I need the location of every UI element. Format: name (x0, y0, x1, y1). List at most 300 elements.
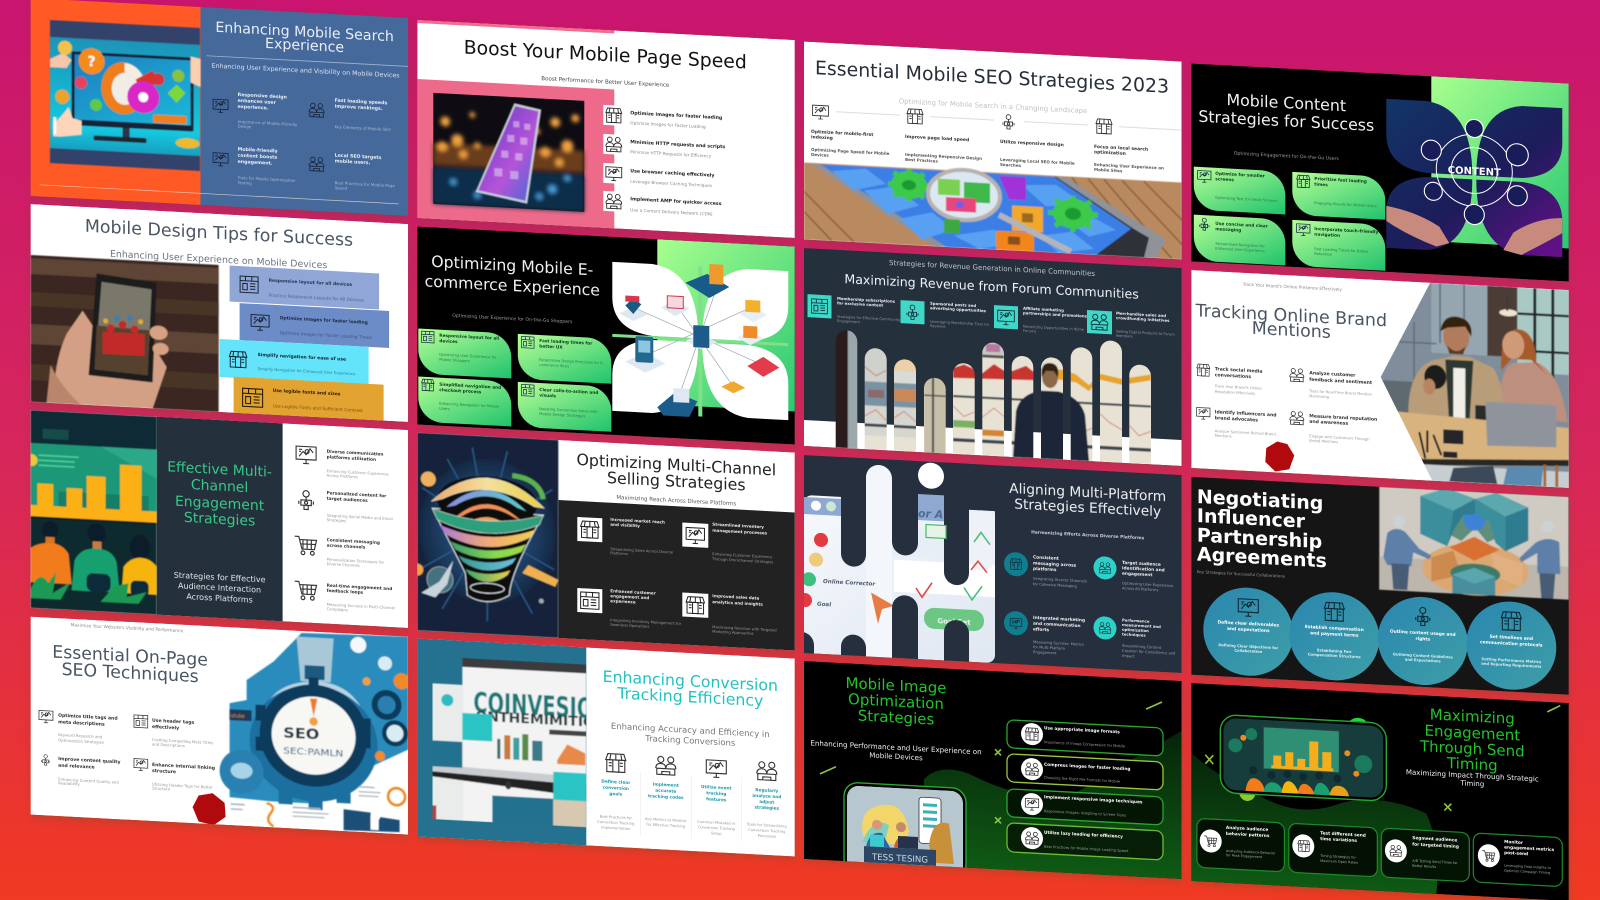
circle item 2: Establish compensation (1305, 625, 1364, 633)
card 4 (518, 382, 611, 432)
item 3: brand advocates (1215, 415, 1258, 424)
item: local seo: mobile users. (335, 158, 370, 166)
item 4: analytics and insights (712, 599, 763, 607)
item: mobile-friendly: Mobile-friendly (238, 147, 278, 155)
item 1 (603, 105, 722, 131)
panel: Enhancing Mobile Search Experience slide (31, 0, 409, 219)
pill 2: Choosing the Right File Formats for Mobile (1044, 776, 1121, 784)
column 2: Key Metrics to Monitor (645, 817, 686, 823)
item 3 (577, 586, 682, 631)
card 3: Better Results (1412, 864, 1436, 869)
item 2: Leveraging Membership Tiers for (930, 320, 989, 327)
item 4 (295, 581, 395, 615)
panel: Negotiating Influencer Partnership slide (1191, 475, 1569, 698)
card 4: Clear calls-to-action and (539, 388, 598, 396)
column 3: Common Mistakes in (697, 820, 735, 826)
item 4: Focus on local search (1094, 145, 1148, 153)
eyebrow: Maximize Your Website's Visibility and Performance (71, 622, 183, 634)
column 3: features (706, 796, 727, 803)
column 1: Define clear (601, 780, 630, 786)
card 1: Responsive layout for all (439, 334, 499, 342)
photo: businessmen and 3D blocks (1379, 485, 1569, 601)
item 4: Real-time engagement and (327, 584, 392, 592)
item 3: experience (610, 598, 636, 605)
pill 4 (1007, 823, 1163, 860)
item 3: Integrated marketing (1033, 616, 1085, 624)
item: fast loading: Fast loading speeds (335, 99, 387, 106)
panel: Mobile Image Optimization slide (804, 661, 1182, 893)
pill 2 (1007, 754, 1163, 790)
item 1: Across Platforms (327, 473, 358, 479)
title: Essential On-Page (52, 642, 208, 671)
panel: Mobile Content Strategies slide (1191, 64, 1569, 285)
illustration: SEO gear graphic: SEO (283, 726, 319, 744)
circle item 1: Defining Clear Objectives for (1218, 643, 1278, 650)
item 3: Use browser caching effectively (630, 168, 714, 179)
item 1: indexing (811, 134, 833, 141)
card 1: Optimizing User Experience for (439, 353, 497, 360)
panel: Tracking Online Brand Mentions slide (1191, 270, 1571, 491)
item: responsive design: experience. (238, 104, 269, 112)
item 3: Engagement (1033, 650, 1057, 655)
illustration: online corrector UI behind pill shapes (789, 434, 995, 702)
item 3: Searches (1000, 162, 1022, 168)
card 1: behavior patterns (1226, 831, 1270, 839)
item: local seo (308, 153, 395, 190)
title: commerce Experience (425, 271, 600, 300)
card 3: Segment audience (1412, 836, 1457, 843)
column 1: Implementation (601, 826, 631, 831)
item 4: Utilizing Header Tags for Better (152, 782, 213, 790)
subtitle: Optimizing User Experience for On-the-Go Shoppers (452, 313, 573, 325)
illustration card: mobile testing: TESS TESING (871, 853, 928, 866)
item 2: effectively (152, 724, 179, 731)
item 3: engagement and (610, 593, 649, 600)
item 4 (1290, 411, 1377, 446)
item 4: Structure (152, 786, 171, 792)
pill 3 (1007, 789, 1163, 825)
card 1: screens (1215, 176, 1234, 183)
title: Channel (191, 477, 248, 496)
subtitle: Tracking Conversions (644, 734, 736, 749)
column 1: Conversion Tracking (597, 820, 634, 826)
card 3: for targeted timing (1412, 842, 1459, 850)
card 2: times (1314, 182, 1328, 188)
item 1: Optimize title tags and (58, 714, 118, 722)
card 3 (1381, 828, 1469, 882)
column 4: Conversion Tracking (748, 828, 785, 834)
item 2: Analyze customer (1309, 371, 1355, 379)
column 4: adjust (759, 799, 774, 806)
subtitle: Enhancing User Experience and Visibility on Mobile Devices (212, 63, 400, 80)
item 4: feedback loops (327, 588, 364, 596)
item 2: Enhancing Customer Experience (712, 552, 772, 559)
circle item 1: Collaboration (1234, 649, 1263, 654)
illustration: SEO gear graphic (220, 627, 410, 834)
pill 1: Use appropriate image formats (1044, 725, 1120, 735)
title: Optimizing Mobile E- (431, 252, 593, 279)
item 1: Enhancing Customer Experience (327, 468, 388, 476)
item 4: Merchandise sales and (1116, 311, 1166, 318)
item 1: Keyword Research and (58, 732, 102, 739)
item 4: optimization (1094, 149, 1126, 157)
column 2: accurate (655, 788, 676, 795)
illustration card: mobile testing (844, 782, 966, 882)
item 4 (1094, 119, 1164, 176)
pill 1 (1007, 720, 1163, 756)
item 2: Target audience (1122, 561, 1161, 568)
title: Maximizing (1430, 705, 1515, 728)
column 3: tracking (706, 790, 726, 797)
item 4: Mobile Sites (1094, 167, 1123, 173)
illustration: monitor with target (50, 20, 201, 171)
item 3: partnerships and promotions (1023, 310, 1088, 319)
title: Partnership (1197, 525, 1322, 553)
card 3: A/B Testing Send Times for (1412, 859, 1458, 865)
item 4: Enhance internal linking (152, 763, 215, 771)
card 2: better UX (539, 343, 563, 351)
card 2 (1289, 823, 1377, 877)
item 2 (900, 299, 990, 331)
column 1 (597, 753, 634, 831)
item 3: Mentions (1215, 434, 1232, 439)
eyebrow subtitle: Strategies for Revenue Generation in Online Communities (889, 258, 1095, 278)
item: mobile-friendly: engagement. (238, 159, 273, 167)
illustration: isometric commerce network (612, 259, 788, 422)
card 2: time variations (1320, 836, 1357, 844)
photo: man viewing charts through arches (804, 318, 1182, 470)
item: mobile-friendly: Testing (237, 180, 252, 186)
item 3: Improve content quality (58, 757, 121, 765)
item 2: Through Omnichannel Strategies (711, 557, 773, 564)
item: fast loading: improve rankings. (335, 104, 383, 112)
item 1: and visibility (610, 522, 640, 528)
illustration: online corrector UI behind pill shapes: Goal (817, 602, 831, 608)
circle item 2: and payment terms (1310, 630, 1359, 639)
item 3: for Multi-Platform (1033, 645, 1066, 651)
card 4: Incorporate touch-friendly (1314, 227, 1378, 235)
icon: red heptagon (193, 792, 226, 826)
illustration: content wheel in petals: CONTENT (1448, 165, 1501, 179)
card 1 (418, 329, 511, 378)
card 3: Users (439, 407, 450, 411)
item 1: Track social media (1215, 367, 1262, 375)
card 3: checkout process (439, 387, 482, 395)
card 3: Streamlined Navigation for (1215, 242, 1265, 248)
item 3: Seamless Operations (610, 623, 649, 629)
item 3: Affiliate marketing (1023, 306, 1064, 313)
column 3: Conversion Tracking (698, 825, 735, 831)
item 4: Performance (1122, 617, 1149, 624)
illustration: online corrector UI behind pill shapes: or A (918, 507, 943, 521)
card 2 (1292, 172, 1385, 220)
item 4: Measure brand reputation (1309, 414, 1377, 423)
photo: phone with tiles, gears and magnifier (804, 162, 1194, 260)
item 3: Integrating Inventory Management for (610, 618, 681, 626)
item 1 (1197, 364, 1262, 396)
pill 4: Best Practices for Mobile Image Loading Speed (1044, 845, 1128, 853)
item 3: Measuring Success: Metrics (1033, 640, 1084, 647)
item 2: Personalized content for (327, 491, 386, 499)
panel: Optimizing Mobile E-commerce slide (417, 226, 795, 448)
card 2: Test different send (1320, 831, 1366, 839)
item: local seo: Best Practices for Mobile Page (335, 180, 395, 188)
bar 4: Use legible fonts and sizes (273, 388, 341, 397)
card 2: Maximum Open Rates (1320, 859, 1358, 865)
photo: monitor with conversion page: COINVESIO (473, 685, 593, 725)
item 2: Revenue (930, 324, 946, 329)
item 2: identification and (1122, 565, 1165, 574)
column 1: Best Practices for (600, 815, 632, 820)
card 1: Analyze audience (1226, 826, 1268, 833)
title: Mentions (1252, 319, 1331, 343)
subtitle: Timing (1459, 778, 1484, 789)
circle item 4: communication protocols (1480, 639, 1543, 649)
panel: Aligning Multi-Platform Strategies slide (789, 434, 1182, 712)
subtitle: Enhancing Accuracy and Efficiency in (611, 722, 770, 740)
item: fast loading (309, 96, 391, 132)
item 4: Enhancing User Experience on (1094, 162, 1164, 171)
bar 3: Simplify Navigation for Enhanced User Experience (258, 366, 356, 376)
circle item 1: and expectations (1227, 626, 1270, 634)
item: responsive design: Responsive design (238, 93, 287, 101)
panel: Mobile Design Tips slide (31, 204, 409, 425)
item: mobile-friendly (212, 147, 296, 186)
subtitle: Mobile Devices (869, 750, 923, 762)
subtitle: Maximizing Impact Through Strategic (1406, 767, 1539, 783)
item 1: Consistent (1033, 555, 1059, 562)
circle item 4: Setting Performance Metrics (1481, 657, 1541, 664)
card 4 (1473, 833, 1562, 887)
card 4: navigation (1314, 232, 1340, 239)
card 1 (1197, 818, 1284, 872)
card 2: Responsive Design Principles for E- (539, 358, 604, 365)
item 3: Monetizing Opportunities in Niche (1023, 325, 1084, 332)
panel: Enhancing Conversion Tracking slide (417, 638, 795, 860)
item 3 (1000, 114, 1075, 171)
item 1: Optimize for mobile-first (811, 130, 873, 138)
title: Optimizing Multi-Channel (577, 450, 776, 480)
bar 3: Simplify navigation for ease of use (258, 352, 346, 363)
icon: red hexagon (1265, 441, 1294, 472)
card 3: Enhancing Navigation for Mobile (439, 402, 499, 409)
item 1: meta descriptions (58, 719, 105, 728)
item 1: for Cohesive Messaging (1033, 582, 1077, 588)
item 4: and awareness (1309, 419, 1348, 427)
item 2: Strategies (327, 517, 346, 523)
card 3: Use concise and clear (1215, 222, 1268, 230)
card 2: Timing Strategies for (1320, 854, 1356, 860)
title: Strategies (858, 707, 934, 729)
circle item 4 (1466, 599, 1556, 692)
title: Mobile Image (846, 674, 946, 697)
photo: monitor with conversion page (432, 656, 593, 828)
item 3: across channels (327, 543, 366, 551)
item 3: Leverage Browser Caching Techniques (630, 179, 712, 189)
photo: monitor with conversion page: ONTHEMIMITIC (475, 710, 593, 731)
card 1 (1194, 167, 1285, 214)
card 3: messaging (1215, 226, 1241, 234)
item 1: Strategies for Effective Community (837, 315, 900, 322)
item 2 (1290, 368, 1373, 402)
item 4 (682, 592, 777, 637)
item 4: techniques (1122, 631, 1146, 638)
item 1 (39, 710, 118, 746)
title: Enhancing Conversion (603, 667, 778, 695)
bar 2: Optimize images for faster loading (280, 315, 368, 326)
item 1: Integrating Diverse Channels (1033, 577, 1087, 583)
circle item 4: and Reporting Requirements (1481, 662, 1542, 669)
card 4: Leveraging Data Insights to (1504, 864, 1551, 870)
item 1: Track Your Brand's Online (1215, 384, 1262, 391)
item 3: Utilize responsive design (1000, 139, 1064, 148)
item 3: and communication (1033, 621, 1081, 629)
column 2: tracking codes (648, 793, 684, 801)
item 1: Engagement (837, 319, 860, 324)
column 4: analyze and (752, 793, 781, 800)
card 1: for Peak Engagement (1226, 853, 1263, 859)
circle item 2: Establishing Fair (1317, 648, 1352, 654)
subtitle: Strategies for Effective (174, 571, 265, 584)
item 1 (577, 515, 674, 559)
item 2: Minimize HTTP Requests for Efficiency (630, 149, 712, 160)
subtitle: Harmonizing Efforts Across Diverse Platforms (1031, 529, 1145, 541)
circle item 3: rights (1415, 636, 1431, 643)
panel: Essential On-Page SEO slide (31, 617, 410, 838)
item 1: Platforms (610, 551, 628, 556)
subtitle: Maximizing Reach Across Diverse Platforms (616, 495, 736, 507)
item 3: Analyze Sentiment Behind Brand (1215, 429, 1276, 436)
circle item 1 (1203, 585, 1293, 678)
item 1: Reputation Effectively (1215, 390, 1256, 396)
item 2: Best Practices (905, 157, 938, 164)
item 4: optimization (1122, 627, 1149, 633)
card 3: Simplified navigation and (439, 383, 501, 391)
item 1: for exclusive content (837, 300, 883, 308)
item 1: Optimize images for faster loading (630, 110, 722, 121)
item 4: Use a Content Delivery Network (CDN) (630, 207, 713, 218)
circle item 2 (1289, 590, 1379, 683)
item: responsive design (212, 92, 297, 129)
item 1: Diverse communication (327, 450, 383, 458)
item 1 (1004, 552, 1087, 589)
title: Mobile Content (1227, 90, 1346, 115)
item 3 (295, 535, 385, 569)
item 2: and Descriptions (152, 742, 185, 748)
item 3: Leveraging Local SEO for Mobile (1000, 157, 1075, 166)
pill 4: Utilize lazy loading for efficiency (1044, 830, 1123, 840)
item: mobile-friendly: content boosts (238, 153, 277, 161)
circle item 2: Compensation Structures (1308, 652, 1362, 659)
item 2: Monitoring (1309, 394, 1329, 399)
card 1: Optimizing Text for Small Screens (1215, 196, 1277, 203)
item: responsive design: Design (238, 123, 252, 129)
title: Tracking Efficiency (616, 683, 763, 710)
item: local seo: Local SEO targets (335, 154, 381, 161)
item: responsive design: enhances user (238, 98, 277, 106)
item 1 (811, 105, 890, 161)
item 2 (299, 489, 393, 526)
item 4: Members (1116, 334, 1133, 339)
item 4: Improved sales data (712, 593, 759, 601)
item 2: Crafting Compelling Meta Titles (152, 737, 213, 745)
item 3: and relevance (58, 763, 95, 771)
title: Experience (265, 36, 344, 56)
item 3: Readability (58, 780, 80, 787)
subtitle: Key Strategies for Successful Collaborations (1197, 569, 1285, 579)
item 1 (296, 446, 389, 481)
item 2: advertising opportunities (930, 305, 987, 313)
circle item 3: and Expectations (1405, 658, 1442, 664)
title: Optimization (848, 690, 944, 713)
title: Strategies for Success (1198, 107, 1374, 135)
title: Engagement (175, 494, 265, 514)
item 4 (603, 191, 722, 218)
item 4: Maximizing Revenue with Targeted (712, 625, 777, 633)
illustration: content wheel in petals (1386, 99, 1562, 257)
panel: Boost Your Mobile Page Speed slide (417, 20, 795, 241)
item 1: Optimizing Page Speed for Mobile (811, 147, 889, 156)
item 2: Across All Platforms (1122, 586, 1158, 592)
column 2 (645, 756, 687, 829)
card 1: Mobile Shoppers (439, 358, 470, 363)
title: Maximizing Revenue from Forum Communities (844, 271, 1139, 302)
illustration: online corrector UI behind pill shapes: Online Corrector (823, 579, 876, 588)
item 3: Enhanced customer (610, 588, 656, 596)
column 2: Implement (653, 782, 679, 789)
item 4: Brand Mentions (1309, 439, 1338, 444)
item 4: structure (152, 768, 176, 775)
title: SEO Techniques (62, 660, 199, 687)
item 1: Optimization Strategies (58, 737, 104, 745)
bar 1: Responsive layout for all devices (269, 278, 352, 288)
card 4: Fast Loading Times for Better (1314, 247, 1368, 254)
title: Strategies Effectively (1014, 496, 1161, 520)
column 4: strategies (754, 804, 780, 812)
item 3 (1004, 611, 1085, 657)
title: Engagement (1424, 722, 1520, 745)
title: Through Send (1419, 737, 1525, 761)
item 2: feedback and sentiment (1309, 377, 1373, 386)
card 3 (1194, 215, 1285, 265)
card 1: Optimize for smaller (1215, 172, 1265, 179)
item 2 (603, 134, 725, 160)
item 3: Forums (1023, 329, 1036, 334)
title: Strategies (184, 510, 255, 530)
card 4: Retention (1314, 252, 1333, 257)
eyebrow: Track Your Brand's Online Presence Effectively (1242, 282, 1342, 293)
pill 1: Importance of Image Compression for Mobile (1044, 740, 1126, 749)
item 2: Sponsored posts and (930, 301, 976, 308)
item 2 (134, 715, 213, 750)
item 2: target audiences (327, 496, 368, 504)
item 1: messaging across (1033, 560, 1077, 569)
card 1: devices (439, 338, 458, 345)
title: Timing (1446, 754, 1498, 775)
item 3 (994, 304, 1088, 336)
card 2: Fast loading times for (539, 339, 592, 347)
card 4: Monitor (1504, 840, 1523, 846)
bar 2: Optimize Images for Faster Loading Times (280, 330, 373, 341)
item 2: Tools for Real-Time Brand Mention (1309, 389, 1372, 397)
photo: couple with camera and laptop (1376, 280, 1571, 490)
item 4 (1094, 616, 1175, 661)
subtitle: Across Platforms (186, 592, 253, 605)
card 4: visuals (539, 392, 557, 399)
item: mobile-friendly: Tools for Mobile Optimization (238, 175, 295, 183)
subtitle: Enhancing User Experience on Mobile Devices (110, 249, 327, 271)
bar 2 (240, 303, 389, 348)
